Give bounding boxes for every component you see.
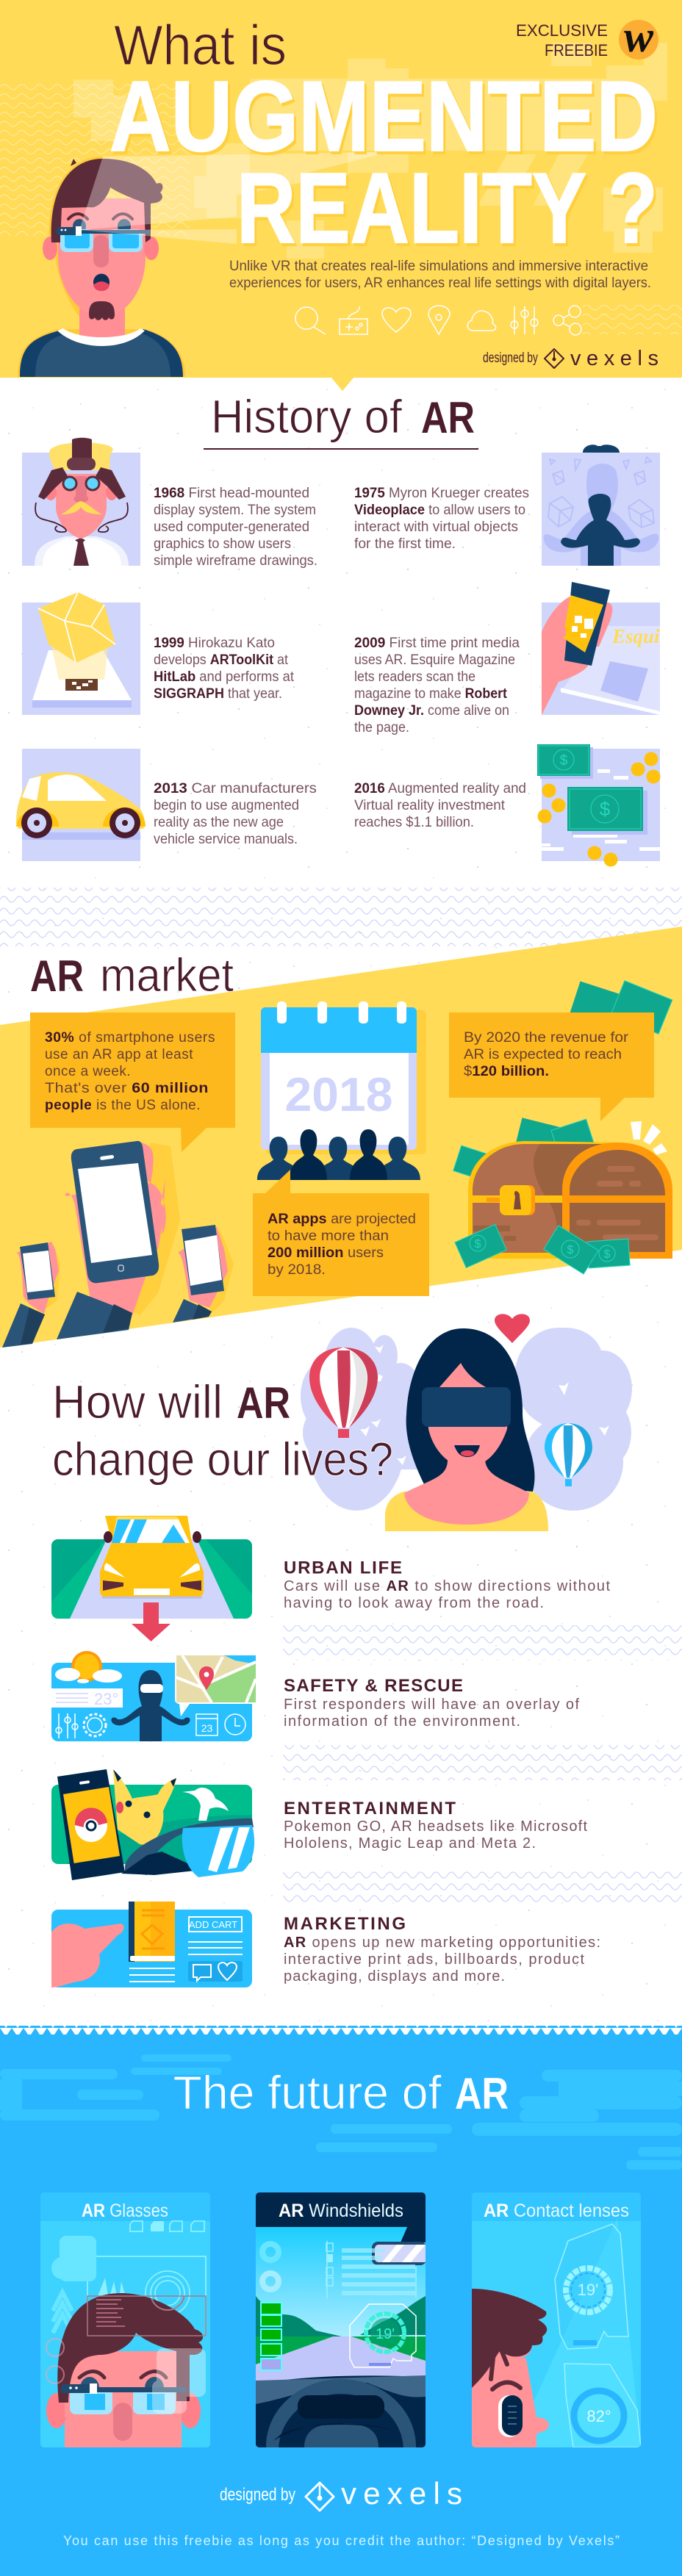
callout: 120 billion xyxy=(449,1012,654,1121)
callout: 30 percent: people is the US alone. xyxy=(45,1098,201,1113)
text: urban life: having to look away from the road. xyxy=(284,1595,544,1611)
panel: safety and rescue illustration: 23 xyxy=(201,1722,212,1734)
illustration: woman with VR headset xyxy=(301,1314,632,1531)
heading: History of AR: History of xyxy=(211,390,402,443)
heading: How will AR: AR xyxy=(237,1378,290,1428)
heading: AR market: market xyxy=(100,949,234,1001)
card: AR windshields: 19' xyxy=(376,2326,395,2342)
panel: marketing illustration: ADD CART xyxy=(189,1919,237,1930)
icons row xyxy=(295,306,581,335)
rays from glasses xyxy=(79,152,390,244)
callout: 200 million: by 2018. xyxy=(268,1262,326,1278)
text: 1968: graphics to show users xyxy=(154,536,291,552)
card: AR windshields: AR Windshields xyxy=(279,2201,403,2221)
callout: 30 percent: once a week. xyxy=(45,1064,131,1079)
callout: 120 billion: $120 billion. xyxy=(464,1064,549,1079)
illustration: man with AR glasses xyxy=(18,156,185,377)
badge: exclusive freebie xyxy=(516,12,658,61)
credit: footer vexels xyxy=(220,2476,462,2511)
text: urban life xyxy=(284,1558,610,1611)
panel: future of AR xyxy=(0,2026,682,2576)
heading: History of AR xyxy=(204,390,478,450)
text: 2013: vehicle service manuals. xyxy=(154,832,298,847)
text: safety and rescue: First responders will have an overlay of xyxy=(284,1697,579,1713)
callout: 30 percent: 30% of smartphone users xyxy=(45,1030,215,1046)
text: 2016: reaches $1.1 billion. xyxy=(354,815,474,830)
text: safety and rescue: SAFETY & RESCUE xyxy=(284,1676,463,1696)
text: 2009: magazine to make Robert xyxy=(354,686,508,702)
heading: AR market xyxy=(30,949,234,1001)
card: AR glasses: AR Glasses xyxy=(82,2201,168,2221)
text: marketing xyxy=(284,1914,600,1985)
text: 1968: simple wireframe drawings. xyxy=(154,553,317,569)
text: intro: experiences for users, AR enhances real life settings with digital layers. xyxy=(229,276,651,291)
text: urban life: URBAN LIFE xyxy=(284,1558,402,1578)
credit: designed by vexels xyxy=(483,347,658,370)
text: entertainment xyxy=(284,1799,587,1852)
callout: 30 percent: That's over 60 million xyxy=(45,1081,209,1096)
text: 1999: 1999 Hirokazu Kato xyxy=(154,636,275,651)
text: 1968: used computer-generated xyxy=(154,519,309,535)
panel: 1975 videoplace xyxy=(542,445,660,566)
text: marketing: AR opens up new marketing opportunities: xyxy=(284,1935,600,1951)
text: 1968 xyxy=(154,486,317,569)
text: footer note: You can use this freebie as long as you credit the author: “Designed by Vexels” xyxy=(63,2533,620,2548)
callout: 200 million xyxy=(253,1170,429,1296)
card: AR contact lenses: 19' xyxy=(578,2281,598,2299)
illustration: treasure chest: $ xyxy=(475,1238,481,1251)
text: marketing: interactive print ads, billboards, product xyxy=(284,1951,584,1968)
panel: safety and rescue illustration xyxy=(51,1651,256,1741)
title: What is: What is xyxy=(114,14,287,77)
text: 2016: 2016 Augmented reality and xyxy=(354,781,526,796)
heading: AR market: AR xyxy=(30,951,84,1001)
illustration: phones in hands xyxy=(2,1141,234,1348)
text: entertainment: Pokemon GO, AR headsets like Microsoft xyxy=(284,1818,587,1835)
card: AR contact lenses: 82° xyxy=(586,2407,611,2425)
heading: the future of AR: The future of xyxy=(173,2066,442,2119)
text: 1999: HitLab and performs at xyxy=(154,669,295,685)
text: 1975 xyxy=(354,486,529,552)
card: AR contact lenses xyxy=(472,2192,641,2447)
panel: 2009 Esquire magazine xyxy=(542,582,660,715)
credit: designed by vexels: designed by xyxy=(483,350,538,366)
text: 1999 xyxy=(154,636,295,702)
panel: safety and rescue illustration: 23° xyxy=(94,1690,118,1708)
text: 2009: lets readers scan the xyxy=(354,669,475,685)
text: 1975: 1975 Myron Krueger creates xyxy=(354,486,529,501)
text: intro: Unlike VR that creates real-life simulations and immersive interactive xyxy=(229,259,648,274)
text: 1999: develops ARToolKit at xyxy=(154,652,289,668)
illustration: treasure chest: $ xyxy=(567,1244,574,1256)
panel: 1968 head mounted display xyxy=(22,438,140,566)
arrow: down xyxy=(132,1602,170,1641)
callout: 120 billion: AR is expected to reach xyxy=(464,1047,622,1062)
panel: AR market band xyxy=(0,927,682,1348)
text: 1975: for the first time. xyxy=(354,536,456,552)
text: 2013: reality as the new age xyxy=(154,815,284,830)
card: AR windshields xyxy=(256,2192,426,2447)
text: marketing: MARKETING xyxy=(284,1914,406,1934)
text: entertainment: ENTERTAINMENT xyxy=(284,1799,456,1818)
callout: 200 million: to have more than xyxy=(268,1228,389,1244)
panel: header xyxy=(0,0,682,378)
text: 2013 xyxy=(154,781,317,847)
card: AR glasses xyxy=(40,2192,210,2447)
illustration: treasure chest xyxy=(453,1118,672,1274)
badge: exclusive freebie: w xyxy=(624,12,654,61)
heading: change our lives: change our lives? xyxy=(52,1433,393,1486)
illustration: money notes behind callout xyxy=(569,981,672,1034)
panel: 2016 investment xyxy=(537,744,660,867)
callout: 120 billion: By 2020 the revenue for xyxy=(464,1030,629,1046)
illustration: calendar with audience xyxy=(257,1001,426,1180)
panel: 2009 Esquire magazine: Esquire xyxy=(611,625,676,647)
text: 2009 xyxy=(354,636,520,735)
panel: 1999 ARToolKit cube xyxy=(22,592,140,715)
title: Augmented Reality xyxy=(110,60,660,267)
text: entertainment: Hololens, Magic Leap and Meta 2. xyxy=(284,1835,536,1852)
callout: 30 percent xyxy=(30,1012,235,1152)
text: 2009: 2009 First time print media xyxy=(354,636,520,651)
text: 2009: the page. xyxy=(354,720,409,735)
text: marketing: packaging, displays and more. xyxy=(284,1968,505,1985)
panel: entertainment illustration xyxy=(51,1769,254,1880)
credit: designed by vexels: vexels xyxy=(570,347,658,370)
text: 2009: Downey Jr. come alive on xyxy=(354,703,509,719)
credit: footer vexels: vexels xyxy=(341,2476,462,2511)
text: 2009: uses AR. Esquire Magazine xyxy=(354,652,515,668)
text: urban life: Cars will use AR to show directions without xyxy=(284,1578,610,1594)
panel: 2016 investment: $ xyxy=(600,798,611,820)
illustration: calendar with audience: 2018 xyxy=(285,1068,392,1121)
text: intro xyxy=(229,259,651,291)
illustration: treasure chest: $ xyxy=(604,1248,611,1261)
callout: 200 million: 200 million users xyxy=(268,1245,384,1261)
text: 1975: Videoplace to allow users to xyxy=(354,503,525,518)
badge: exclusive freebie: EXCLUSIVE xyxy=(516,21,608,40)
badge: exclusive freebie: FREEBIE xyxy=(545,41,608,60)
text: 2013: 2013 Car manufacturers xyxy=(154,781,317,796)
heading: the future of AR: AR xyxy=(455,2069,509,2118)
callout: 200 million: AR apps are projected xyxy=(268,1212,416,1227)
panel: 2013 car xyxy=(16,749,146,861)
panel: 2016 investment: $ xyxy=(560,753,568,769)
callout: 30 percent: use an AR app at least xyxy=(45,1047,193,1062)
text: 1975: interact with virtual objects xyxy=(354,519,518,535)
text: 2013: begin to use augmented xyxy=(154,798,299,813)
panel: urban life illustration xyxy=(51,1516,252,1619)
text: 1968: display system. The system xyxy=(154,503,316,518)
text: 1968: 1968 First head-mounted xyxy=(154,486,309,501)
heading: How will AR: How will xyxy=(52,1375,223,1428)
heading: History of AR: AR xyxy=(421,393,475,442)
card: AR contact lenses: AR Contact lenses xyxy=(484,2201,629,2221)
text: 2016 xyxy=(354,781,526,830)
credit: footer vexels: designed by xyxy=(220,2485,295,2505)
text: safety and rescue xyxy=(284,1676,579,1730)
arrow: header pointer xyxy=(331,377,354,391)
panel: marketing illustration xyxy=(51,1902,252,1987)
text: 1999: SIGGRAPH that year. xyxy=(154,686,282,702)
text: safety and rescue: information of the environment. xyxy=(284,1713,520,1730)
text: 2016: Virtual reality investment xyxy=(354,798,506,813)
